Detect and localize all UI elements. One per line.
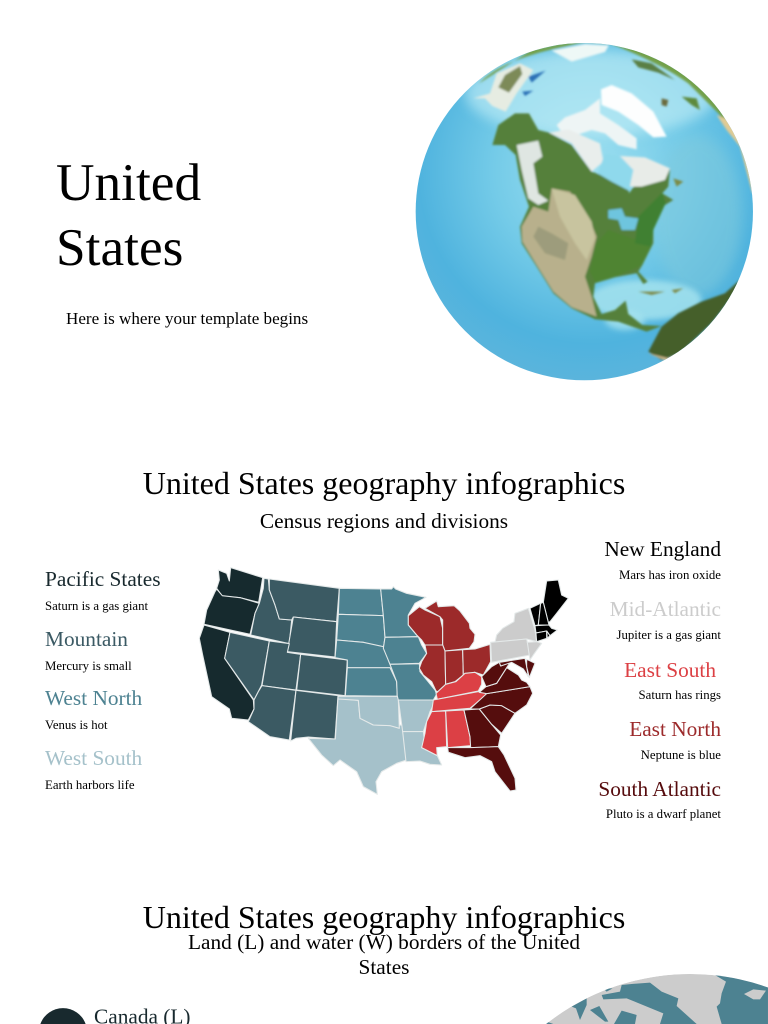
note: Mid-Atlantic: Jupiter is a gas giant: [616, 628, 721, 642]
section subheading: borders: Land (L) and water (W) borders of the United: [188, 930, 580, 954]
central and eastern states: [335, 580, 568, 791]
western states: [199, 568, 407, 794]
title: United: [56, 152, 201, 212]
section subheading: census regions: Census regions and divisions: [260, 509, 508, 533]
note: East North: Neptune is blue: [641, 748, 721, 762]
note: Mountain: Mercury is small: [45, 659, 132, 673]
note: New England: Mars has iron oxide: [619, 568, 721, 582]
map: US census regions: [199, 568, 568, 794]
title: States: [56, 217, 183, 277]
legend: left column: [45, 567, 160, 792]
legend: right column: [598, 537, 721, 821]
legend item: Pacific States: Pacific States: [45, 567, 160, 591]
snow: [549, 129, 603, 172]
legend item: West South: West South: [45, 746, 142, 770]
South America: [648, 278, 742, 360]
lower section decorative globe map: [545, 974, 768, 1024]
section subheading: borders: States: [359, 955, 409, 979]
title: [56, 152, 201, 277]
legend item: New England: New England: [604, 537, 721, 561]
globe image: [416, 38, 763, 380]
legend item: Mid-Atlantic: Mid-Atlantic: [610, 597, 721, 621]
note: South Atlantic: Pluto is a dwarf planet: [606, 807, 721, 821]
section heading: borders: United States geography infographics: [143, 899, 625, 935]
subtitle: Here is where your template begins: [66, 309, 308, 328]
section subheading: borders: [188, 930, 580, 979]
legend item: West North: West North: [45, 686, 142, 710]
legend item: East North: East North: [629, 717, 721, 741]
legend item: South Atlantic: South Atlantic: [598, 777, 721, 801]
note: West South: Earth harbors life: [45, 778, 135, 792]
legend item: East South: East South: [624, 658, 716, 682]
North America base: [492, 113, 673, 332]
icon: Canada circle: [40, 1008, 86, 1024]
legend item: Mountain: Mountain: [45, 627, 128, 651]
dry interior: [522, 188, 597, 317]
note: West North: Venus is hot: [45, 718, 108, 732]
Hudson Bay and Great Lakes: [596, 158, 632, 192]
section heading: census: United States geography infographics: [143, 465, 625, 501]
note: East South: Saturn has rings: [639, 688, 721, 702]
note: Pacific States: Saturn is a gas giant: [45, 599, 148, 613]
